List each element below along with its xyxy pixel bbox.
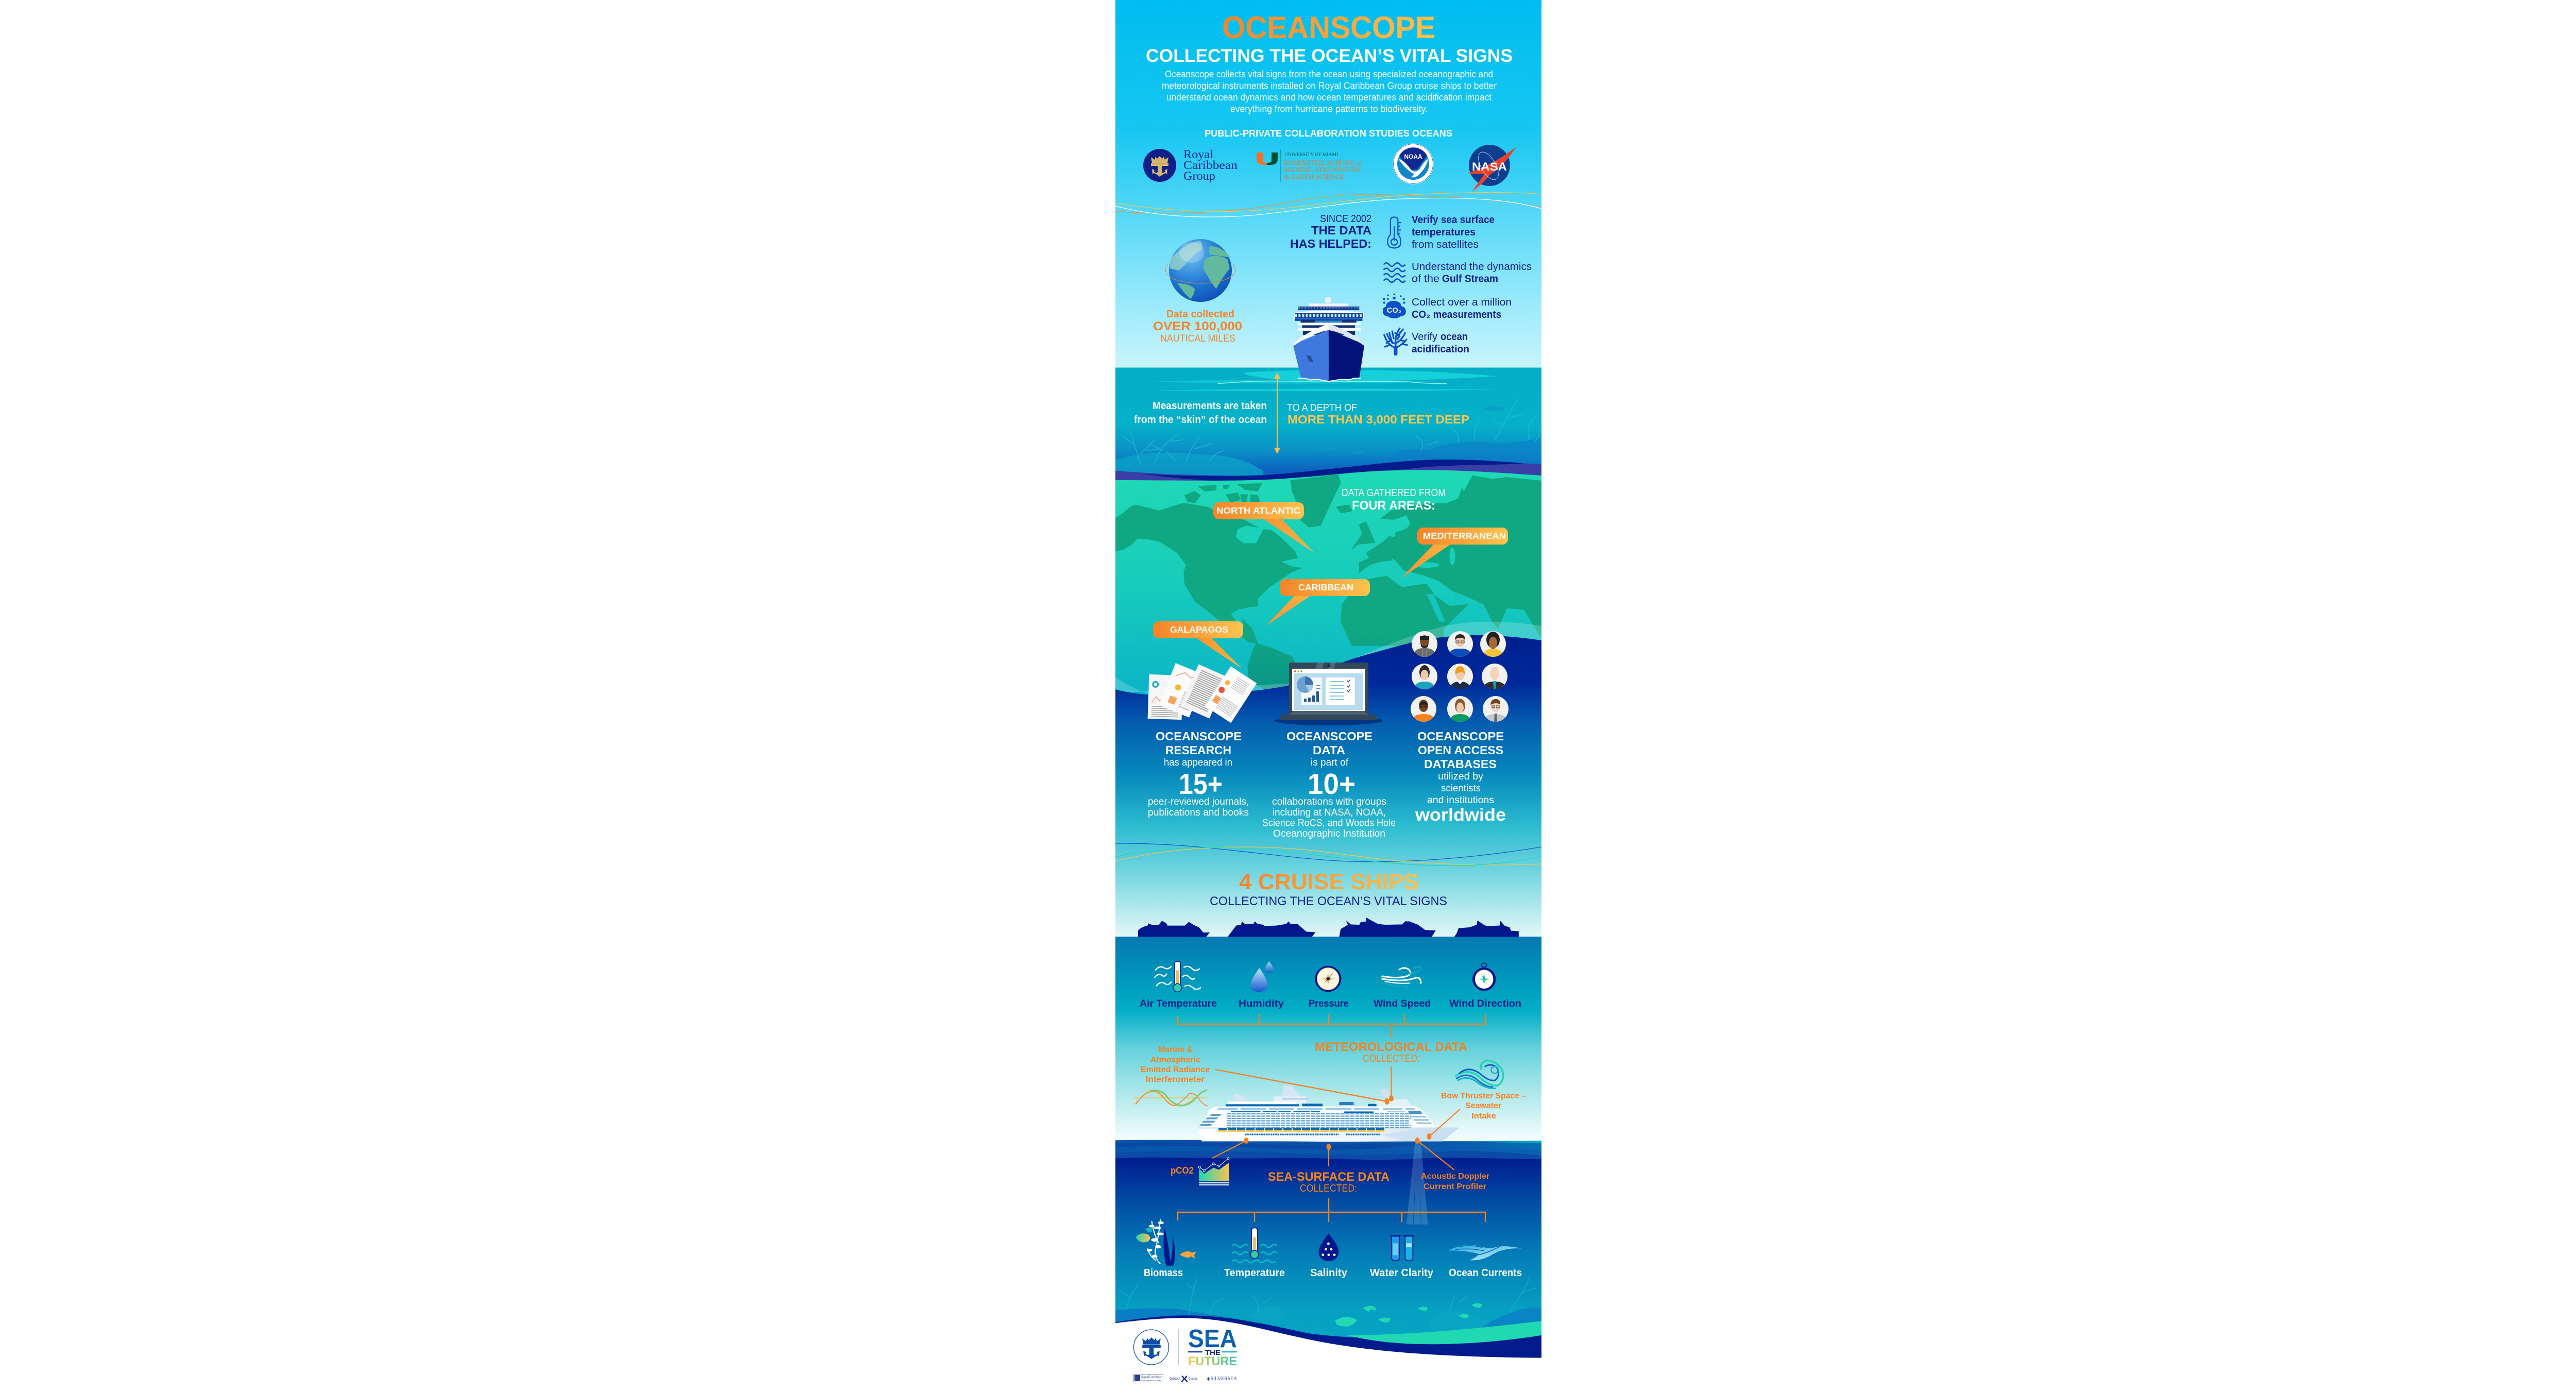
- icon: coral: [1384, 328, 1407, 354]
- stat: nautical miles: NAUTICAL MILES: [1160, 333, 1235, 344]
- panel: meteorological air section: [1115, 937, 1541, 1143]
- sonar beams: [1406, 1141, 1428, 1225]
- text: Oceanscope research: [1148, 730, 1249, 818]
- logo: Royal Caribbean International: RoyalCaribbean: [1141, 1375, 1162, 1379]
- icon: front view cruise ship: [1293, 297, 1365, 381]
- label: interferometer: Atmospheric: [1150, 1056, 1200, 1064]
- logo: Royal Caribbean anchor roundel: [1133, 1330, 1168, 1365]
- sea-surface instrument labels: Biomass: [1144, 1267, 1183, 1279]
- logo: Sea the Future: [1188, 1325, 1237, 1368]
- label: bow thruster: [1441, 1092, 1526, 1121]
- meteorological instrument labels: Wind Speed: [1374, 998, 1431, 1009]
- people avatars: [1411, 631, 1509, 722]
- heading: meteorological data: COLLECTED:: [1363, 1053, 1420, 1064]
- label: bow thruster: Intake: [1471, 1112, 1496, 1121]
- sea-surface instrument labels: Ocean Currents: [1449, 1267, 1522, 1279]
- chart: pCO2: [1198, 1158, 1229, 1185]
- icon: compass: [1472, 963, 1496, 991]
- helped item: CO2 measurements: CO₂ measurements: [1412, 309, 1501, 320]
- logo: Royal Caribbean International: INTERNATIONAL: [1141, 1380, 1162, 1382]
- data has helped heading: [1290, 213, 1371, 250]
- background: sky header: [1115, 0, 1541, 368]
- text: Oceanscope research: OCEANSCOPE: [1156, 730, 1242, 743]
- text: Oceanscope data: Oceanographic Institution: [1273, 828, 1385, 839]
- helped item: sea surface temperatures: [1412, 214, 1495, 250]
- panel: blue research section: [1115, 622, 1541, 937]
- helped item: gulf stream: Understand the dynamics: [1412, 261, 1532, 273]
- logo: NOAA: [1393, 143, 1433, 184]
- text: Oceanscope open access databases: and institutions: [1427, 795, 1494, 806]
- icon: humidity: [1250, 961, 1274, 992]
- callout: Galapagos: GALAPAGOS: [1170, 624, 1228, 635]
- icon: cruise ship side view: [1199, 1085, 1458, 1141]
- text: Oceanscope data: is part of: [1311, 757, 1349, 768]
- logo: Royal Caribbean International: [1133, 1375, 1163, 1382]
- label: interferometer: Marine &: [1158, 1045, 1193, 1054]
- decorative wave lines middle: [1115, 843, 1541, 866]
- stat: nautical miles: OVER 100,000: [1153, 319, 1242, 333]
- helped item: ocean acidification: Verify: [1412, 331, 1437, 343]
- subtitle: COLLECTING THE OCEAN’S VITAL SIGNS: [1146, 46, 1513, 66]
- subheading: collecting vital signs: COLLECTING THE OCEAN’S VITAL SIGNS: [1210, 894, 1447, 908]
- text: Oceanscope research: RESEARCH: [1165, 743, 1231, 757]
- reef silhouettes upper: [1114, 397, 1542, 477]
- reef silhouettes lower: [1114, 1278, 1542, 1338]
- logo: Sea the Future: THE: [1205, 1348, 1221, 1356]
- collaboration heading: PUBLIC-PRIVATE COLLABORATION STUDIES OCEANS: [1205, 128, 1452, 139]
- helped item: gulf stream: of the: [1412, 273, 1439, 284]
- text: skin of the ocean: [1134, 400, 1267, 426]
- callout: Galapagos: [1153, 621, 1243, 669]
- helped item: ocean acidification: [1412, 331, 1469, 355]
- label: pCO2: pCO2: [1171, 1165, 1194, 1176]
- text: skin of the ocean: from the “skin” of the ocean: [1134, 414, 1267, 426]
- heading: sea-surface data: COLLECTED:: [1300, 1183, 1357, 1194]
- logo: NASA: [1467, 145, 1516, 192]
- logo: NOAA: NOAA: [1404, 153, 1422, 160]
- icon: ocean currents: [1449, 1245, 1521, 1260]
- meteorological instrument labels: Air Temperature: [1140, 998, 1217, 1009]
- logo: Royal Caribbean Group: Royal: [1183, 148, 1213, 161]
- sea-surface instrument labels: Temperature: [1224, 1267, 1285, 1279]
- line: meteorological pointer: [1389, 1066, 1394, 1101]
- heading: sea-surface data: [1268, 1170, 1389, 1194]
- helped item: gulf stream: [1412, 261, 1532, 284]
- callout: Caribbean: CARIBBEAN: [1298, 582, 1353, 592]
- line: acoustic doppler pointer: [1415, 1138, 1454, 1170]
- icon: CO2 cloud: [1383, 294, 1406, 318]
- icon: swirl wave: [1456, 1060, 1503, 1089]
- logo: Celebrity Cruises: Cruises: [1189, 1377, 1197, 1381]
- data has helped heading: SINCE 2002: [1320, 213, 1371, 225]
- heading: four areas: DATA GATHERED FROM: [1342, 487, 1446, 499]
- icon: biomass: [1136, 1219, 1196, 1266]
- helped item: CO2 measurements: Collect over a million: [1412, 297, 1512, 308]
- callout: Caribbean: [1266, 579, 1370, 626]
- text: Oceanscope research: has appeared in: [1164, 757, 1232, 768]
- icon: thermometer: [1387, 217, 1401, 248]
- infographic: [1115, 0, 1541, 1384]
- text: Oceanscope data: OCEANSCOPE: [1286, 730, 1372, 743]
- text: Oceanscope data: including at NASA, NOAA,: [1273, 807, 1386, 818]
- logo: Royal Caribbean Group: [1143, 148, 1238, 182]
- heading: 4 cruise ships: 4 CRUISE SHIPS: [1239, 870, 1419, 894]
- logo: University of Miami: & EARTH SCIENCE: [1284, 173, 1344, 180]
- stat: nautical miles: Data collected: [1166, 309, 1234, 320]
- text: depth: TO A DEPTH OF: [1287, 403, 1357, 413]
- heading: sea-surface data: SEA-SURFACE DATA: [1268, 1170, 1389, 1184]
- label: interferometer: Interferometer: [1146, 1075, 1205, 1084]
- text: Oceanscope data: Science RoCS, and Woods Hole: [1262, 818, 1396, 828]
- text: Oceanscope open access databases: OPEN ACCESS: [1418, 743, 1503, 757]
- text: Oceanscope data: [1262, 730, 1396, 839]
- logo: NASA: NASA: [1472, 160, 1507, 173]
- logo: Royal Caribbean Group: Group: [1183, 169, 1215, 182]
- logo: Celebrity Cruises: [1170, 1374, 1197, 1384]
- stat: nautical miles: [1153, 309, 1242, 344]
- heading: four areas: [1342, 487, 1446, 513]
- arrow: depth: [1274, 372, 1280, 454]
- meteorological instrument labels: Humidity: [1239, 998, 1284, 1009]
- intro paragraph: understand ocean dynamics and how ocean temperatures and acidification impact: [1166, 92, 1492, 103]
- sea-surface instrument labels: [1144, 1267, 1522, 1279]
- label: acoustic doppler: Current Profiler: [1423, 1182, 1486, 1191]
- data has helped heading: THE DATA: [1311, 224, 1371, 237]
- globe with orbit: [1165, 239, 1235, 302]
- icon: laptop with dashboard: [1275, 663, 1383, 725]
- label: acoustic doppler: Acoustic Doppler: [1421, 1172, 1489, 1181]
- logo: University of Miami: MARINE, ATMOSPHERIC: [1284, 166, 1363, 173]
- text: Oceanscope open access databases: [1415, 730, 1506, 825]
- icon: CO2 cloud: CO₂: [1387, 307, 1401, 315]
- label: bow thruster: Seawater: [1465, 1101, 1501, 1110]
- text: Oceanscope research: publications and books: [1148, 807, 1249, 818]
- helped item: ocean acidification: ocean: [1440, 331, 1468, 343]
- text: Oceanscope open access databases: utilized by: [1438, 771, 1484, 782]
- text: skin of the ocean: Measurements are taken: [1153, 400, 1267, 412]
- meteorological instrument labels: Pressure: [1309, 998, 1349, 1009]
- helped item: sea surface temperatures: from satellites: [1412, 239, 1479, 250]
- decorative wave lines top: [1115, 193, 1541, 217]
- panel: sea surface waves: [1114, 1140, 1542, 1360]
- helped item: gulf stream: Gulf Stream: [1442, 273, 1498, 284]
- line: interferometer pointer: [1215, 1070, 1389, 1105]
- intro paragraph: Oceanscope collects vital signs from the ocean using specialized oceanographic and: [1165, 69, 1493, 79]
- intro paragraph: [1162, 69, 1497, 114]
- sea-surface instrument labels: Water Clarity: [1370, 1267, 1434, 1279]
- icon: pressure gauge: [1315, 966, 1341, 992]
- callout: Mediterranean: MEDITERRANEAN: [1423, 531, 1506, 541]
- bottom white wave with navy and green bands: [1114, 1315, 1542, 1391]
- heading: meteorological data: [1315, 1040, 1467, 1064]
- icon: salinity: [1318, 1233, 1338, 1261]
- panel: world map: [1114, 470, 1542, 701]
- label: interferometer: [1141, 1045, 1210, 1084]
- logo: University of Miami: [1257, 149, 1363, 182]
- text: Oceanscope research: peer-reviewed journals,: [1148, 796, 1249, 807]
- icon: sine waves: [1133, 1090, 1208, 1106]
- line: bow thruster pointer: [1427, 1109, 1460, 1140]
- icon: wind: [1382, 967, 1421, 990]
- logo: Celebrity Cruises: X: [1181, 1374, 1189, 1384]
- label: acoustic doppler: [1421, 1172, 1489, 1191]
- text: Oceanscope data: DATA: [1313, 743, 1345, 757]
- panel: ocean surface: [1115, 367, 1541, 483]
- text: Oceanscope research: 15+: [1179, 768, 1223, 801]
- heading: meteorological data: METEOROLOGICAL DATA: [1315, 1040, 1467, 1054]
- callout: Mediterranean: [1401, 528, 1508, 578]
- bracket: sea surface: [1178, 1198, 1485, 1222]
- icon: research papers: [1148, 663, 1257, 723]
- helped item: sea surface temperatures: temperatures: [1412, 227, 1476, 238]
- wave band divider: [1114, 460, 1542, 484]
- icon: air temperature: [1155, 961, 1200, 992]
- text: Oceanscope data: 10+: [1308, 768, 1355, 801]
- icon: waves: [1384, 263, 1405, 282]
- meteorological instrument labels: [1140, 998, 1521, 1009]
- text: depth: [1287, 403, 1469, 426]
- text: Oceanscope open access databases: OCEANSCOPE: [1417, 730, 1504, 743]
- intro paragraph: meteorological instruments installed on Royal Caribbean Group cruise ships to better: [1162, 80, 1497, 91]
- data has helped heading: HAS HELPED:: [1290, 237, 1371, 250]
- four ship silhouettes: [1138, 918, 1519, 937]
- callout: North Atlantic: [1213, 502, 1314, 553]
- label: bow thruster: Bow Thruster Space –: [1441, 1092, 1526, 1100]
- logo: Sea the Future: FUTURE: [1188, 1354, 1237, 1368]
- helped item: ocean acidification: acidification: [1412, 344, 1469, 355]
- label: interferometer: Emitted Radiance: [1141, 1065, 1210, 1074]
- text: Oceanscope open access databases: DATABASES: [1424, 757, 1497, 771]
- text: depth: MORE THAN 3,000 FEET DEEP: [1287, 413, 1469, 426]
- sea-surface instrument labels: Salinity: [1310, 1267, 1348, 1279]
- helped item: CO2 measurements: [1412, 297, 1512, 320]
- main title: OCEANSCOPE: [1222, 10, 1435, 45]
- helped item: sea surface temperatures: Verify sea surface: [1412, 214, 1495, 226]
- text: Oceanscope data: collaborations with groups: [1272, 796, 1386, 807]
- line: sea surface pointer: [1326, 1144, 1331, 1166]
- logo: Celebrity Cruises: Celebrity: [1170, 1377, 1180, 1381]
- icon: water clarity: [1390, 1235, 1414, 1261]
- logo: University of Miami: ROSENSTIEL SCHOOL of: [1284, 159, 1363, 166]
- logo: Silversea: ◈SILVERSEA: [1207, 1376, 1238, 1382]
- callout: North Atlantic: NORTH ATLANTIC: [1216, 505, 1300, 516]
- line: pCO2 pointer: [1212, 1138, 1249, 1158]
- meteorological instrument labels: Wind Direction: [1449, 998, 1521, 1009]
- text: Oceanscope open access databases: scientists: [1441, 783, 1481, 794]
- logo: University of Miami: UNIVERSITY OF MIAMI: [1284, 152, 1338, 157]
- bracket: meteorological: [1178, 1014, 1485, 1038]
- logo: Royal Caribbean Group: Caribbean: [1183, 159, 1238, 172]
- logo: Sea the Future: SEA: [1188, 1325, 1237, 1353]
- intro paragraph: everything from hurricane patterns to biodiversity.: [1230, 104, 1428, 114]
- heading: four areas: FOUR AREAS:: [1352, 499, 1435, 513]
- icon: temperature: [1232, 1228, 1277, 1263]
- text: Oceanscope open access databases: worldwide: [1415, 805, 1506, 825]
